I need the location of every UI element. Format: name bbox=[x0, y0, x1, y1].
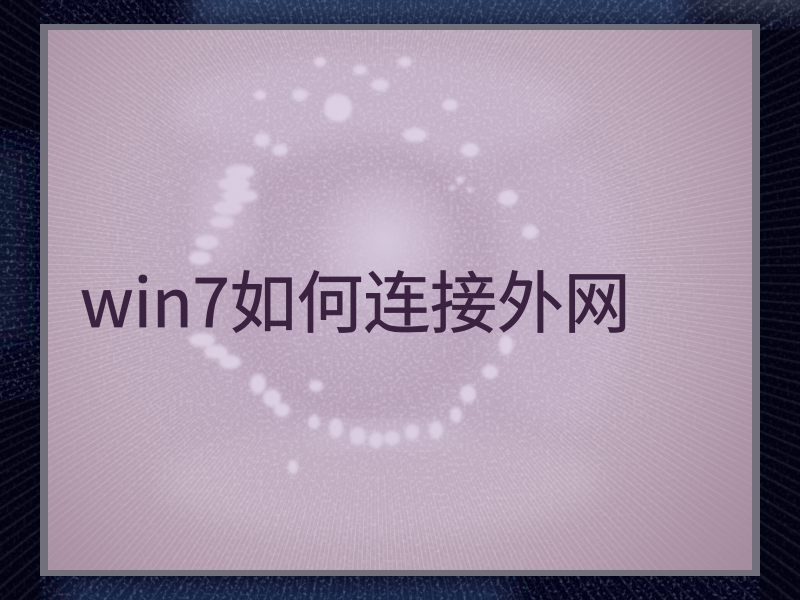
title: win7如何连接外网 bbox=[80, 251, 631, 347]
panel ray streaks bbox=[48, 30, 752, 570]
panel: burst image with pink veil bbox=[48, 30, 752, 570]
ring of crystalline blobs bbox=[189, 57, 538, 474]
